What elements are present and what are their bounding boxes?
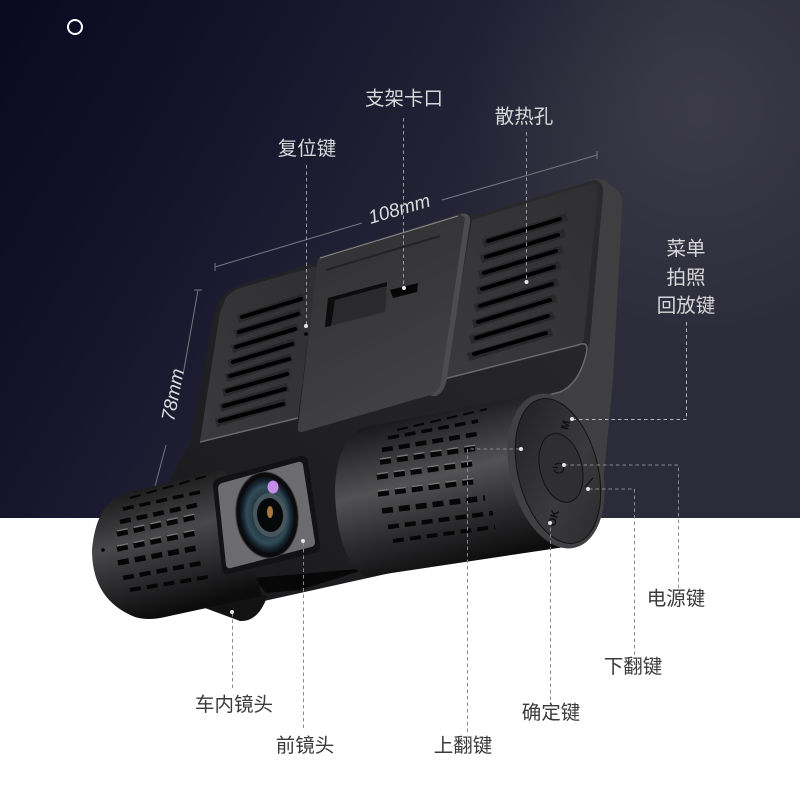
right barrel vents [397,409,487,430]
callout: 车内镜头: 车内镜头 [195,694,273,716]
callout: 复位键 [278,138,336,328]
button cap: M [559,419,573,431]
callout: 前镜头: 前镜头 [276,735,334,757]
callout: 散热孔: 散热孔 [495,106,553,128]
right side strip [520,179,622,545]
callout: 上翻键 [434,447,523,757]
dimension: height 78mm: 78mm [158,367,189,423]
button cap: ⏻ [550,461,569,476]
callout: 菜单拍照回放键: 回放键 [657,295,715,317]
front lens module [213,456,320,574]
dimension: width 108mm [215,151,597,271]
mount plate [298,214,470,432]
callout: 下翻键 [586,487,662,678]
callout: 菜单拍照回放键: 拍照 [666,267,706,289]
button cap [492,383,620,559]
callout: 支架卡口: 支架卡口 [365,88,443,110]
dimension: width 108mm: 108mm [366,191,433,229]
callout: 菜单拍照回放键: 菜单 [666,238,706,260]
callout: 支架卡口 [365,88,443,290]
callout: 确定键 [522,521,580,724]
button cap: OK [546,509,562,528]
left barrel [92,470,262,619]
shell ledge highlight [200,344,587,442]
callout: 散热孔 [495,106,553,284]
left vent panel [200,266,317,441]
callout: 复位键: 复位键 [278,138,336,160]
right barrel [335,396,585,577]
left barrel vents [130,475,210,498]
icon: small ring [68,20,82,34]
right vent panel [445,184,598,378]
right vent slots [468,217,567,357]
callout: 下翻键: 下翻键 [604,656,662,678]
callout: 电源键: 电源键 [647,588,705,610]
underside slot [253,568,370,593]
reset hole [304,332,308,336]
dimension: height 78mm [154,290,202,490]
callout: 前镜头 [276,539,334,757]
callout: 车内镜头 [195,610,273,716]
center power button [532,429,590,507]
bottom mount [205,585,267,621]
callout: 菜单拍照回放键 [570,238,715,421]
callout: 上翻键: 上翻键 [434,735,492,757]
callout: 电源键 [562,463,705,610]
mount slot [325,282,387,327]
left vent slots [216,297,304,423]
dash camera [92,179,622,621]
camera shell [165,180,603,603]
lens [232,469,302,561]
callout: 确定键: 确定键 [522,702,580,724]
